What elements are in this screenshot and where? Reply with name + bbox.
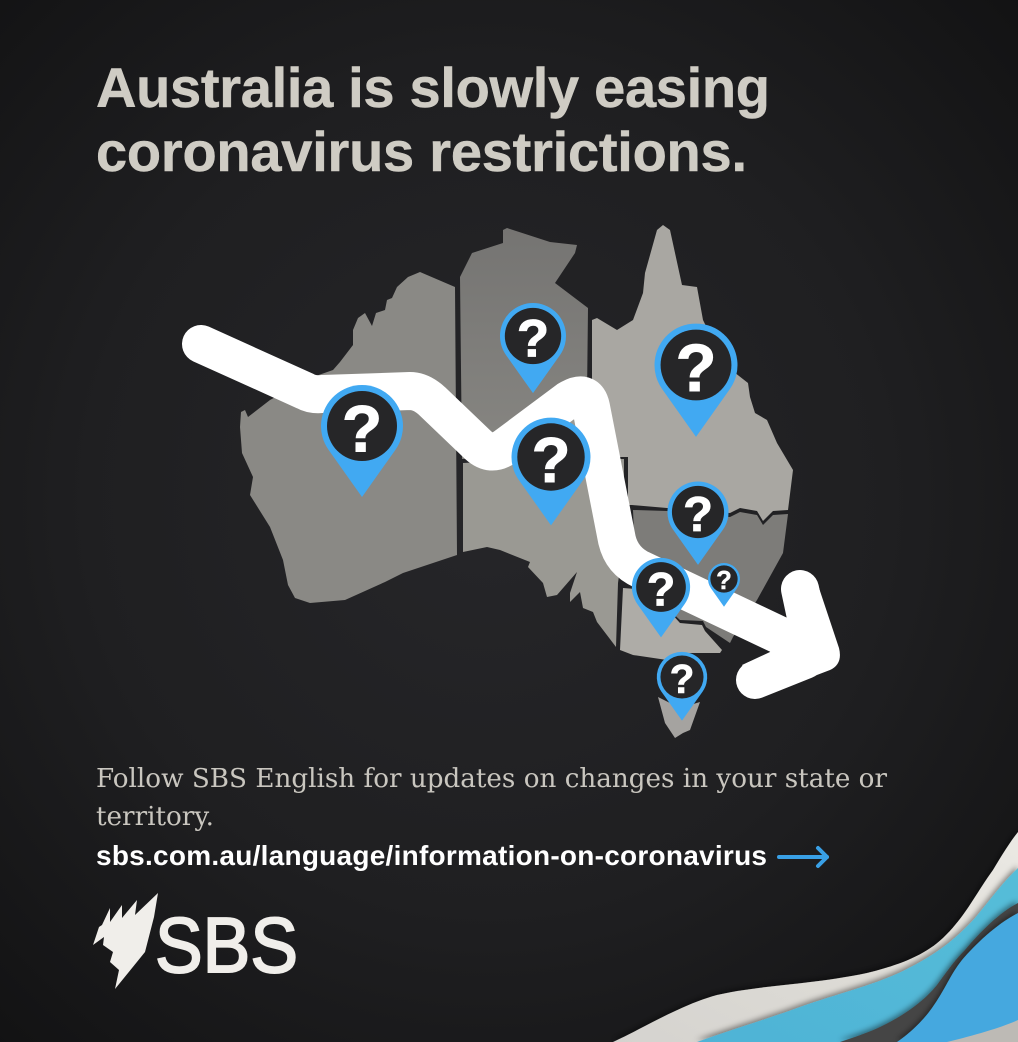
body text: territory. (96, 802, 214, 832)
pin: New South Wales (667, 482, 729, 565)
wave: dark grey layer (840, 903, 1018, 1042)
title: Australia is slowly easing (96, 56, 770, 119)
arrow shaft (201, 344, 815, 652)
pin: Western Australia (321, 385, 403, 497)
state: Queensland (592, 225, 793, 521)
icon: link arrow (779, 848, 827, 866)
pin: Australian Capital Territory: ? (716, 567, 732, 595)
pin: Queensland (655, 324, 737, 437)
pin: Northern Territory: ? (517, 310, 549, 369)
pin: Australian Capital Territory (708, 563, 740, 607)
downward trend arrow (201, 344, 840, 696)
title: coronavirus restrictions. (96, 120, 747, 183)
SBS logo (93, 893, 298, 989)
pin: Tasmania (657, 652, 707, 721)
pin: Victoria (632, 558, 690, 637)
wave: grey lower layer (947, 1020, 1018, 1042)
body text: Follow SBS English for updates on changes in your state or (96, 764, 888, 794)
pin: New South Wales: ? (683, 487, 713, 542)
wave: bright blue layer (897, 913, 1018, 1042)
link text: sbs.com.au/language/information-on-coronavirus (96, 840, 767, 871)
pin: South Australia (512, 418, 590, 525)
wordmark: SBS (155, 901, 298, 989)
pin: Northern Territory (500, 303, 566, 393)
state: Victoria (620, 588, 722, 660)
state: New South Wales (633, 510, 788, 643)
wave: light blue layer (697, 868, 1018, 1042)
pin: Western Australia: ? (342, 392, 382, 466)
pin: South Australia: ? (532, 425, 570, 496)
pin: Queensland: ? (676, 332, 716, 406)
wave: white layer (613, 832, 1018, 1042)
pin: Tasmania: ? (670, 656, 694, 702)
icon: SBS mark (93, 893, 158, 989)
map of Australia (240, 225, 793, 738)
pin: Victoria: ? (647, 563, 675, 615)
state: Northern Territory (460, 228, 588, 459)
state: South Australia (463, 400, 624, 647)
arrow head (800, 589, 810, 636)
state: Tasmania (658, 697, 700, 738)
decorative wave corner (613, 832, 1018, 1042)
state: Western Australia (240, 272, 457, 603)
